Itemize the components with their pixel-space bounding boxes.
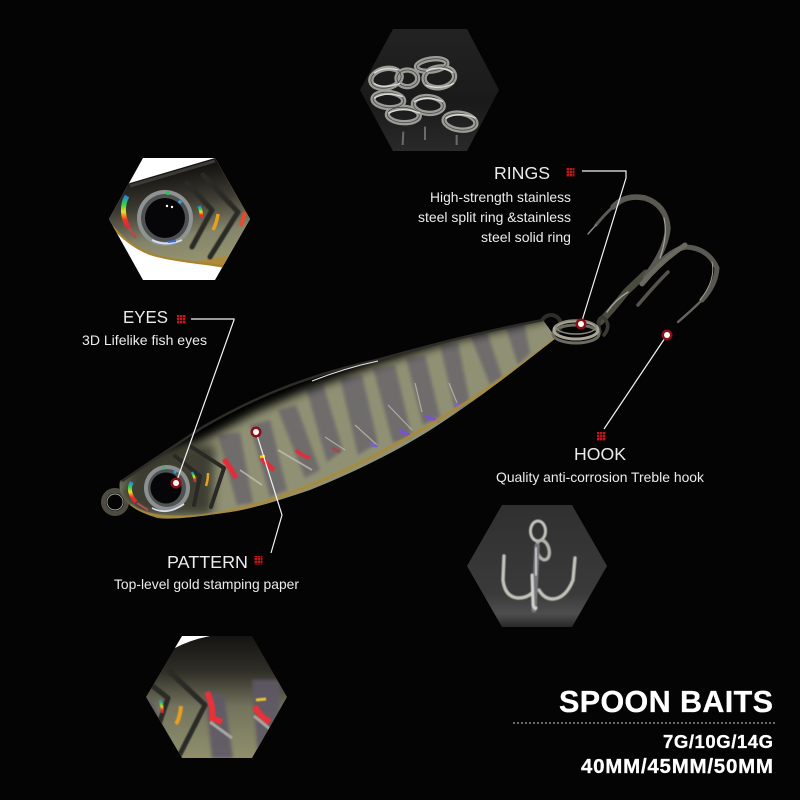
icon: treble hook — [588, 197, 717, 335]
panel: hook photo hexagon — [465, 503, 610, 629]
text block: pattern: PATTERN — [167, 552, 248, 572]
title block: spoon baits: 7G/10G/14G — [663, 731, 773, 752]
callout: hook leader line — [604, 335, 667, 429]
stripe highlights — [240, 383, 457, 485]
marker: rings — [576, 318, 586, 330]
text block: hook: Quality anti-corrosion Treble hook — [496, 469, 705, 485]
text block: rings: RINGS — [494, 163, 550, 183]
lure nose eyelet — [541, 315, 561, 335]
text block: pattern: Top-level gold stamping paper — [114, 576, 299, 592]
holographic marks — [371, 404, 463, 446]
panel: eye close-up hexagon — [109, 158, 250, 280]
text block: eyes — [82, 307, 207, 348]
eye-side holographic marks — [130, 472, 208, 510]
title block: spoon baits: 40MM/45MM/50MM — [581, 755, 773, 778]
title block: spoon baits: SPOON BAITS — [559, 685, 773, 719]
title block: spoon baits — [513, 685, 775, 778]
text block: eyes: EYES — [123, 307, 168, 327]
dark back shading — [120, 320, 547, 487]
callout: eyes leader line — [176, 319, 234, 483]
marker: hook — [662, 330, 672, 340]
lure eye — [144, 465, 190, 511]
lure tail eyelet — [104, 490, 126, 514]
marker: pattern — [250, 426, 262, 438]
marker: eyes — [170, 478, 182, 488]
text block: rings: steel solid ring — [481, 229, 571, 245]
body stripes — [218, 322, 530, 505]
text block: eyes: 3D Lifelike fish eyes — [82, 332, 207, 348]
text block: hook — [496, 432, 705, 485]
illustration: spoon bait lure — [101, 313, 600, 519]
text block: rings — [418, 163, 574, 245]
split ring — [553, 320, 599, 343]
text block: hook: HOOK — [574, 444, 626, 464]
callout: rings leader line — [581, 171, 626, 324]
lure body — [120, 320, 554, 519]
text block: rings: High-strength stainless — [430, 189, 571, 205]
belly edge — [130, 338, 556, 517]
text block: pattern — [114, 552, 299, 592]
panel: pattern close-up hexagon — [146, 636, 287, 758]
text block: rings: steel split ring &stainless — [418, 209, 571, 225]
chevron gill lines — [175, 446, 224, 507]
panel: rings photo hexagon — [360, 29, 499, 151]
callout: pattern leader line — [256, 432, 282, 553]
